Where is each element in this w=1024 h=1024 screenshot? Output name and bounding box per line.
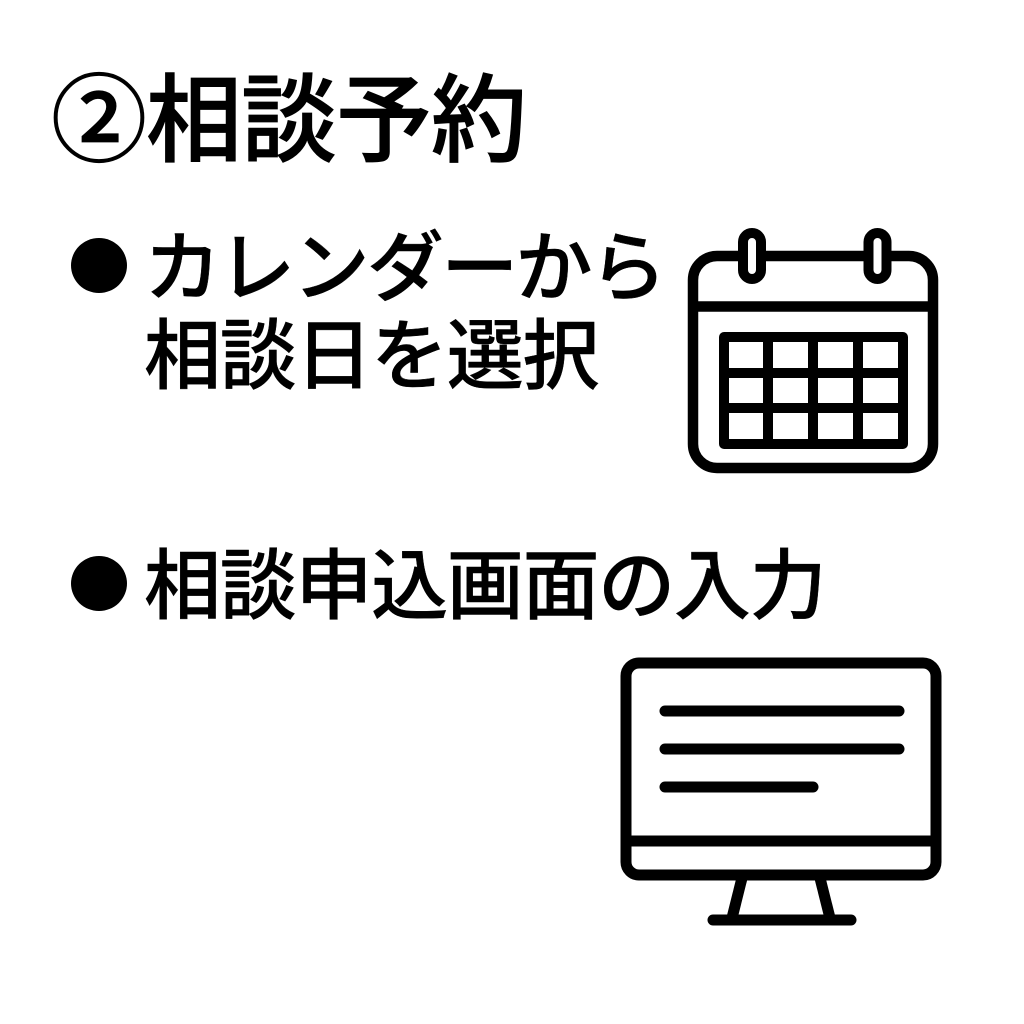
title: ②相談予約 (51, 68, 526, 175)
text: select date from calendar: 相談日を選択 (144, 314, 598, 400)
bullet 2 (71, 556, 127, 611)
text: select date from calendar: カレンダーから (144, 226, 664, 312)
bullet 1 (71, 238, 127, 293)
text: enter on consultation form: 相談申込画面の入力 (144, 544, 825, 630)
text: select date from calendar (144, 226, 664, 400)
